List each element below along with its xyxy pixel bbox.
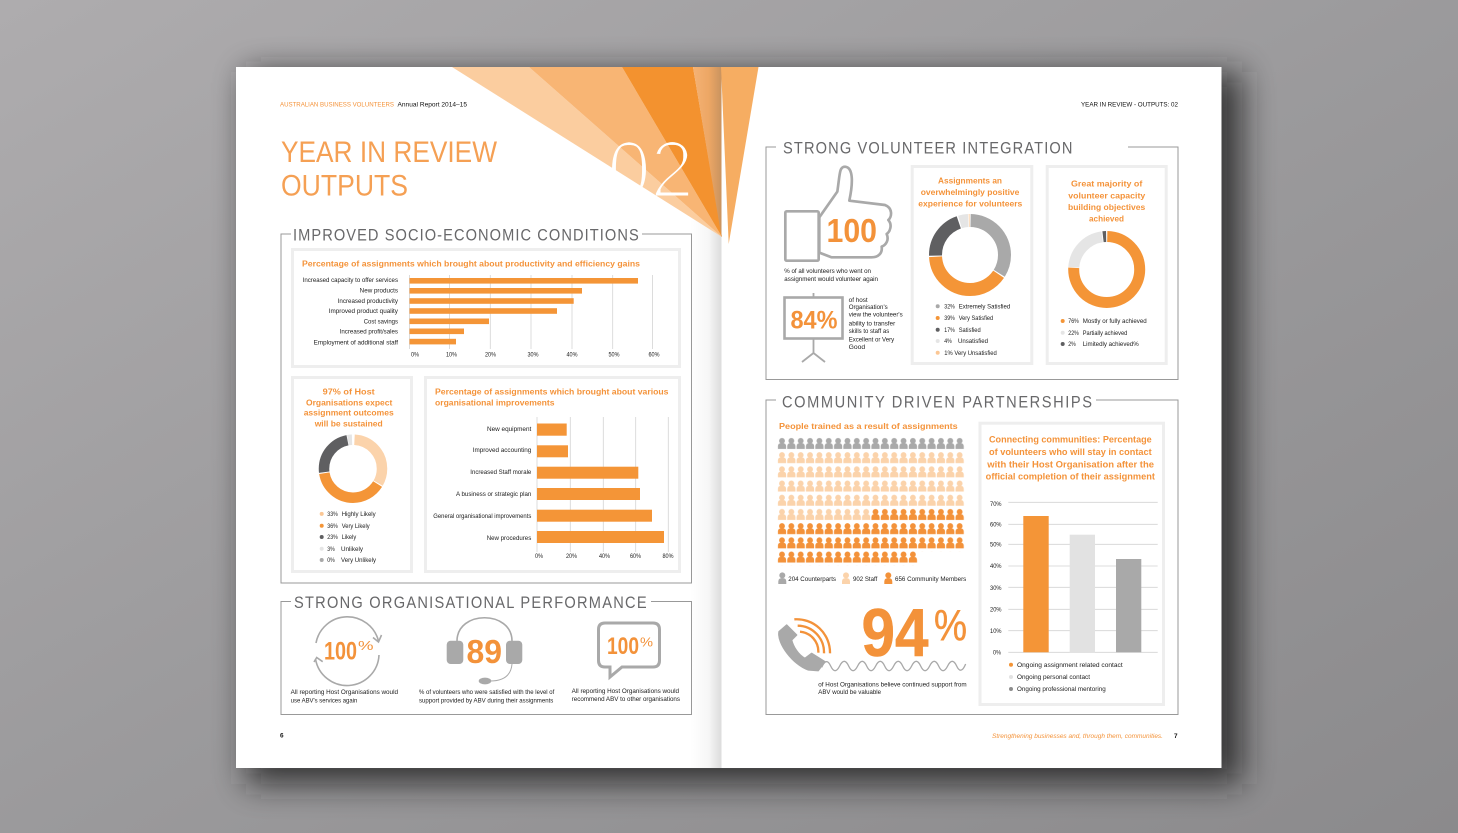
- column chart: 20%: [990, 606, 1002, 614]
- section: strong volunteer integration: [766, 139, 1178, 380]
- footer: right page: 7: [1174, 733, 1178, 740]
- caption: of Host Organisations believe continued support from: [818, 681, 967, 688]
- header: left page: [280, 101, 467, 108]
- section heading: STRONG ORGANISATIONAL PERFORMANCE: [294, 594, 647, 612]
- column chart: 30%: [990, 585, 1002, 592]
- bar chart: 50%: [608, 352, 620, 359]
- panel title: Great majority of: [1071, 179, 1142, 189]
- caption: Good: [849, 344, 866, 351]
- panel title: [304, 387, 394, 429]
- panel title: Organisations expect: [306, 398, 392, 408]
- donut legend: 1% Very Unsatisfied: [944, 350, 997, 357]
- bar chart: 40%: [566, 352, 578, 359]
- chart title: Percentage of assignments which brought about productivity and efficiency gains: [302, 259, 640, 269]
- bar chart: 60%: [648, 352, 660, 359]
- bar chart: [433, 417, 674, 560]
- bar chart: 80%: [662, 553, 674, 560]
- panel title: assignment outcomes: [304, 408, 394, 418]
- caption: use ABV's services again: [291, 698, 358, 704]
- donut legend: [1061, 318, 1147, 348]
- panel title: overwhelmingly positive: [921, 187, 1020, 197]
- chart title: organisational improvements: [435, 398, 555, 408]
- bar chart: 20%: [485, 352, 496, 359]
- caption: skills to staff as: [849, 328, 889, 335]
- panel: staying in contact column chart: [980, 423, 1164, 704]
- donut chart: [324, 440, 382, 498]
- pictogram legend: [778, 572, 966, 584]
- bar chart: 40%: [599, 553, 610, 560]
- icon: speech bubble 100%: [598, 623, 660, 677]
- panel title: building objectives: [1068, 202, 1146, 212]
- decorative orange rays: [452, 67, 758, 244]
- left page: [236, 67, 722, 768]
- caption: [419, 689, 555, 704]
- donut legend: 17%: [944, 327, 955, 334]
- panel title: [918, 176, 1023, 209]
- bar chart: 20%: [566, 553, 577, 560]
- donut legend: [320, 511, 377, 564]
- stat: 94%: %: [934, 601, 967, 650]
- caption: [291, 689, 399, 704]
- caption: [784, 268, 879, 283]
- section: strong organisational performance: [281, 594, 692, 714]
- chart legend: Ongoing professional mentoring: [1017, 686, 1106, 693]
- donut legend: 76%: [1068, 318, 1079, 325]
- people trained heading: People trained as a result of assignments: [779, 421, 958, 431]
- donut legend: [936, 303, 1011, 357]
- bar chart: 10%: [446, 352, 457, 359]
- right page: [722, 67, 1222, 768]
- caption: [849, 297, 903, 351]
- bar chart: New equipment: [487, 426, 532, 433]
- donut legend: 3%: [327, 546, 335, 553]
- bar chart: Increased Staff morale: [470, 469, 532, 476]
- column chart: 40%: [990, 563, 1002, 570]
- panel title: achieved: [1089, 214, 1124, 224]
- bar chart: New products: [360, 288, 398, 295]
- icon: thumbs up 100: 100: [826, 213, 877, 250]
- chart legend: Ongoing assignment related contact: [1017, 662, 1123, 669]
- column chart: 10%: [990, 628, 1002, 635]
- bar chart: Increased profit/sales: [340, 328, 398, 335]
- donut chart: [936, 220, 1004, 290]
- bar chart: A business or strategic plan: [456, 491, 532, 498]
- chart title: official completion of their assignment: [986, 471, 1155, 481]
- pictogram legend: 902 Staff: [853, 576, 878, 583]
- page title: YEAR IN REVIEW: [281, 136, 497, 169]
- icon: headset 89: 89: [466, 634, 502, 671]
- caption: recommend ABV to other organisations: [572, 696, 680, 703]
- chart title: Percentage of assignments which brought about various: [435, 387, 669, 397]
- donut legend: 33%: [327, 511, 338, 518]
- panel title: 97% of Host: [323, 387, 375, 397]
- section heading: STRONG VOLUNTEER INTEGRATION: [783, 139, 1072, 158]
- column chart: 60%: [990, 522, 1002, 528]
- caption: assignment would volunteer again: [784, 276, 879, 283]
- spine fold shading: [690, 67, 722, 768]
- panel: productivity bar chart: [292, 250, 680, 366]
- caption: % of all volunteers who went on: [784, 268, 872, 275]
- donut legend: Likely: [342, 534, 357, 541]
- page shadow: [246, 72, 1242, 784]
- donut legend: Very Likely: [342, 523, 371, 530]
- pictogram legend: 656 Community Members: [895, 576, 966, 583]
- header: right page: YEAR IN REVIEW - OUTPUTS: 02: [1081, 101, 1178, 108]
- bar chart: General organisational improvements: [433, 513, 531, 520]
- icon: telephone with signal: [779, 619, 966, 671]
- donut legend: 23%: [327, 534, 338, 541]
- bar chart: [303, 275, 660, 359]
- stat: 94%: 94: [862, 595, 929, 671]
- chart title: with their Host Organisation after the: [986, 459, 1154, 469]
- icon: speech bubble 100%: %: [640, 634, 653, 650]
- icon: cycle arrows 100%: 100: [324, 637, 357, 665]
- chart title: [435, 387, 669, 408]
- donut legend: Limitedly achieved%: [1083, 341, 1139, 348]
- bar chart: Increased capacity to offer services: [303, 277, 398, 284]
- bar chart: Improved product quality: [329, 308, 399, 315]
- caption: support provided by ABV during their assignments: [419, 698, 553, 704]
- icon: presentation board 84%: [784, 293, 842, 362]
- bar chart: 30%: [528, 352, 539, 359]
- panel title: [1068, 179, 1146, 224]
- page title: OUTPUTS: [281, 170, 408, 203]
- section: community driven partnerships: [766, 393, 1178, 714]
- bar chart: 60%: [630, 553, 641, 560]
- donut legend: 2%: [1068, 341, 1076, 348]
- pictogram: people trained: [778, 438, 965, 566]
- pictogram legend: 204 Counterparts: [788, 576, 836, 583]
- section number: 02: [608, 125, 694, 215]
- donut legend: 32%: [944, 303, 955, 310]
- icon: cycle arrows 100%: [314, 617, 382, 686]
- donut chart: [1074, 236, 1140, 302]
- bar chart: Employment of additional staff: [314, 340, 398, 347]
- donut legend: 22%: [1068, 330, 1079, 337]
- donut legend: Mostly or fully achieved: [1083, 318, 1147, 325]
- section: improved socio-economic conditions: [281, 226, 692, 583]
- donut legend: Extremely Satisfied: [959, 303, 1011, 310]
- panel title: Assignments an: [938, 176, 1002, 186]
- panel: outcomes sustained donut: [292, 378, 412, 572]
- icon: speech bubble 100%: 100: [607, 633, 639, 660]
- section heading: IMPROVED SOCIO-ECONOMIC CONDITIONS: [293, 226, 639, 245]
- chart legend: [1009, 662, 1123, 693]
- icon: cycle arrows 100%: %: [358, 638, 374, 653]
- icon: thumbs up 100: [785, 167, 891, 261]
- caption: [572, 688, 680, 703]
- panel title: experience for volunteers: [918, 199, 1023, 209]
- caption: ability to transfer: [849, 320, 895, 328]
- donut legend: 4%: [944, 338, 952, 345]
- caption: of host: [849, 297, 868, 304]
- bar chart: New procedures: [487, 535, 531, 542]
- donut legend: 0%: [327, 557, 335, 564]
- chart title: Connecting communities: Percentage: [989, 435, 1152, 445]
- donut legend: Satisfied: [959, 327, 981, 334]
- donut legend: 39%: [944, 315, 955, 322]
- header: left page: AUSTRALIAN BUSINESS VOLUNTEERS: [280, 101, 394, 108]
- header: left page: Annual Report 2014–15: [398, 101, 467, 108]
- chart legend: Ongoing personal contact: [1017, 674, 1090, 681]
- panel title: will be sustained: [314, 419, 383, 429]
- panel: positive experience donut: [912, 166, 1032, 364]
- donut legend: Very Unlikely: [341, 557, 377, 564]
- caption: view the volunteer's: [849, 312, 903, 319]
- donut legend: Unsatisfied: [958, 338, 989, 345]
- panel title: volunteer capacity: [1068, 191, 1146, 201]
- bar chart: 0%: [411, 352, 419, 359]
- bar chart: Improved accounting: [473, 447, 532, 454]
- section heading: COMMUNITY DRIVEN PARTNERSHIPS: [782, 393, 1092, 412]
- donut legend: Very Satisfied: [959, 315, 994, 322]
- bar chart: 0%: [535, 553, 543, 560]
- panel: capacity building donut: [1047, 166, 1166, 364]
- column chart: 0%: [993, 650, 1001, 656]
- caption: Excellent or Very: [849, 336, 895, 344]
- chart title: of volunteers who will stay in contact: [989, 447, 1152, 457]
- column chart: [990, 501, 1158, 656]
- caption: ABV would be valuable: [818, 689, 882, 696]
- caption: All reporting Host Organisations would: [291, 689, 399, 696]
- panel: organisational improvements bar chart: [426, 378, 680, 572]
- caption: All reporting Host Organisations would: [572, 688, 680, 695]
- page title: [281, 136, 497, 203]
- donut legend: Partially achieved: [1083, 330, 1128, 337]
- chart title: [986, 435, 1155, 481]
- icon: presentation board 84%: 84%: [790, 306, 838, 334]
- column chart: 50%: [990, 542, 1002, 548]
- bar chart: Cost savings: [364, 318, 398, 325]
- donut legend: Unlikely: [341, 546, 364, 553]
- caption: % of volunteers who were satisfied with the level of: [419, 689, 555, 696]
- page number 6: 6: [280, 733, 284, 740]
- donut legend: 36%: [327, 523, 338, 530]
- icon: headset 89: [447, 618, 522, 684]
- bar chart: Increased productivity: [338, 298, 399, 305]
- footer: right page: Strengthening businesses and, through them, communities.: [992, 733, 1163, 740]
- donut legend: Highly Likely: [342, 511, 377, 518]
- column chart: 70%: [990, 501, 1002, 508]
- caption: Organisation's: [849, 304, 888, 311]
- caption: [818, 681, 967, 696]
